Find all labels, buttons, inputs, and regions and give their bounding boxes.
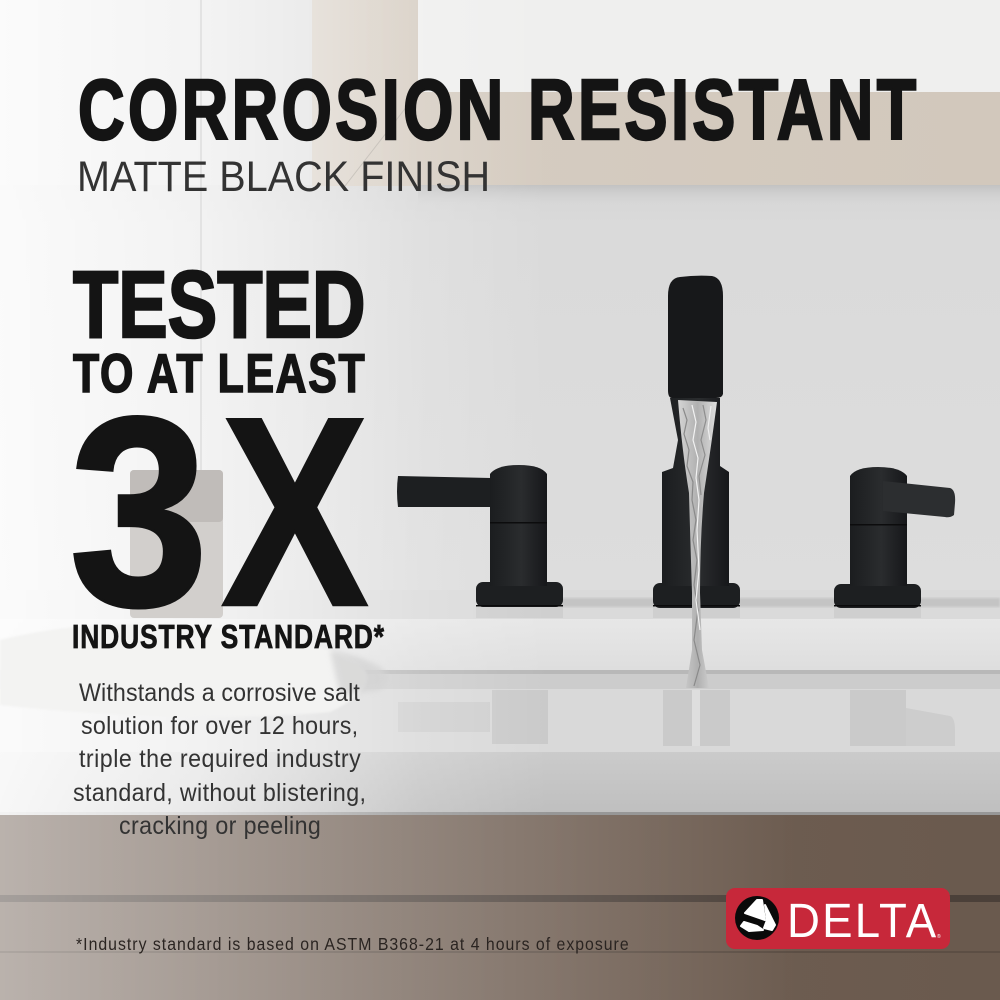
countertop: [0, 590, 1000, 815]
basin reflections of faucet: [398, 690, 955, 746]
mirror frame mitre: [345, 92, 418, 186]
body description: Withstands a corrosive salt: [79, 679, 360, 707]
left handle: [397, 465, 563, 607]
centre spout: [653, 276, 740, 608]
headline: tested to at least 3X industry standard: [69, 252, 384, 663]
water stream: [678, 400, 717, 688]
right handle: [834, 467, 955, 608]
wall: [0, 185, 1000, 595]
body description: solution for over 12 hours,: [81, 712, 358, 740]
footnote: *Industry standard is based on ASTM B368-21 at 4 hours of exposure: [76, 934, 629, 954]
faucet: [397, 276, 1000, 688]
counter reflections under bases: [476, 607, 921, 618]
bottle: [130, 470, 223, 618]
body description: standard, without blistering,: [73, 779, 366, 807]
wall seam: [200, 0, 202, 590]
registered mark: ®: [937, 933, 941, 940]
body description: triple the required industry: [79, 745, 362, 773]
shadows on counter: [560, 598, 1000, 607]
headline: tested to at least 3X industry standard: TO AT LEAST: [73, 343, 365, 404]
Delta logo: [726, 888, 950, 949]
cabinet: [0, 815, 1000, 1000]
body description: cracking or peeling: [119, 812, 321, 840]
towel: [0, 624, 387, 717]
headline: tested to at least 3X industry standard: TESTED: [73, 252, 365, 358]
title: CORROSION RESISTANT: [78, 62, 916, 157]
mirror with wooden frame: [312, 0, 1000, 207]
subtitle: MATTE BLACK FINISH: [77, 152, 490, 200]
Delta logo: DELTA: [787, 894, 937, 947]
headline: tested to at least 3X industry standard: INDUSTRY STANDARD*: [72, 619, 384, 656]
headline: tested to at least 3X industry standard: 3: [69, 362, 209, 663]
headline: tested to at least 3X industry standard: X: [221, 361, 369, 663]
body description: [73, 679, 366, 840]
icon: delta triangle: [735, 896, 779, 940]
